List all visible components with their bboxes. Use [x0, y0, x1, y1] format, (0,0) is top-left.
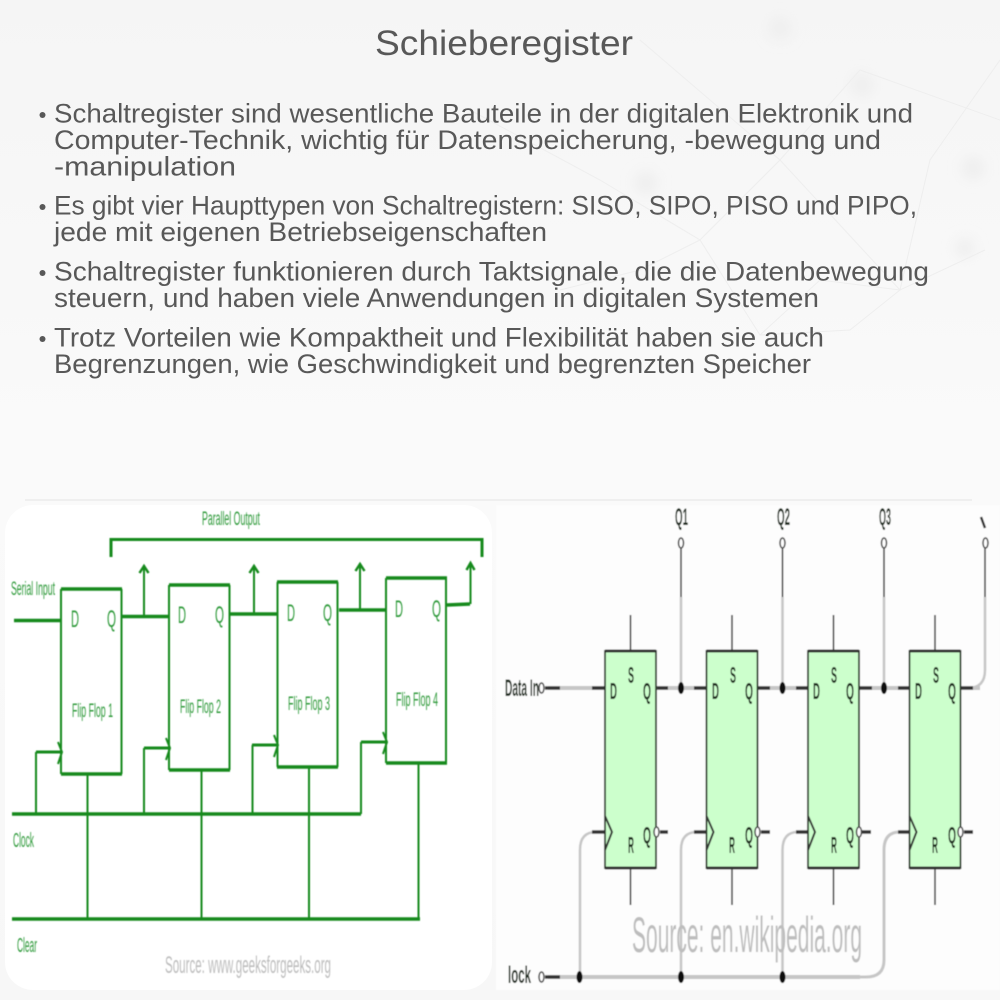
diagram labels: lock: [508, 962, 531, 989]
diagram labels: Q2: [777, 504, 790, 531]
diagram labels: D: [813, 678, 820, 704]
diagram labels: S: [730, 662, 736, 688]
light grey wires: [548, 597, 985, 977]
bullet 1: Schaltregister sind wesentliche Bauteile in der digitalen Elektronik und: [54, 98, 913, 128]
diagram labels: Parallel Output: [202, 509, 260, 530]
diagram labels: Q: [215, 602, 224, 629]
panel: D flip-flop shift register diagram: Q: [948, 822, 956, 848]
bullet 2: Es gibt vier Haupttypen von Schaltregistern: SISO, SIPO, PISO und PIPO,: [54, 190, 917, 220]
diagram labels: Q: [643, 822, 651, 848]
diagram labels: Data In: [505, 675, 539, 702]
bullet 3: [40, 256, 929, 313]
diagram labels: S: [831, 662, 837, 688]
flip-flop boxes: [61, 578, 447, 774]
wiring: [12, 540, 482, 919]
panel: SIPO flip-flop diagram: Source: www.geeksforgeeks.org: [165, 952, 331, 979]
diagram labels: Flip Flop 1: [72, 701, 113, 722]
diagram labels: Serial Input: [11, 579, 55, 600]
junction dots: [576, 682, 887, 983]
diagram labels: S: [628, 662, 634, 688]
diagram labels: D: [71, 606, 79, 633]
bullet 4: [40, 322, 824, 379]
diagram labels: Clear: [17, 935, 37, 957]
diagram labels: S: [933, 662, 939, 688]
register blocks: [605, 651, 960, 868]
diagram labels: D: [915, 678, 922, 704]
diagram labels: Q: [745, 822, 753, 848]
diagram labels: Flip Flop 2: [180, 697, 221, 718]
diagram labels: [505, 504, 956, 989]
diagram labels: D: [287, 600, 295, 627]
diagram labels: R: [932, 832, 938, 858]
bullet 1: -manipulation: [54, 152, 236, 182]
diagram labels: Flip Flop 3: [288, 694, 330, 715]
bullet 1: Computer-Technik, wichtig für Datenspeicherung, -bewegung und: [54, 125, 881, 155]
bullet list: [40, 98, 929, 379]
terminals: [539, 538, 988, 982]
diagram labels: D: [178, 602, 186, 629]
bullet 2: [40, 190, 917, 247]
diagram labels: Q: [846, 678, 854, 704]
diagram labels: Q: [643, 678, 651, 704]
diagram labels: R: [628, 832, 634, 858]
panel: D flip-flop shift register diagram: [496, 504, 1000, 990]
bullet 2: jede mit eigenen Betriebseigenschaften: [53, 217, 547, 247]
bullet 3: steuern, und haben viele Anwendungen in digitalen Systemen: [54, 283, 819, 313]
bullet 4: Trotz Vorteilen wie Kompaktheit und Flexibilität haben sie auch: [54, 322, 824, 352]
diagram labels: Q: [846, 822, 854, 848]
panel: D flip-flop shift register diagram: Q: [948, 678, 956, 704]
diagram labels: Clock: [13, 830, 34, 852]
diagram labels: D: [395, 596, 403, 623]
panel: SIPO flip-flop diagram: Q: [432, 596, 441, 623]
diagram labels: Q1: [675, 504, 688, 531]
diagram labels: R: [831, 832, 837, 858]
bullet 1: [40, 98, 913, 182]
bullet 3: Schaltregister funktionieren durch Taktsignale, die die Datenbewegung: [54, 256, 929, 286]
diagram labels: Q: [745, 678, 753, 704]
title: Schieberegister: [375, 24, 633, 63]
diagram labels: D: [610, 678, 617, 704]
diagram labels: Q: [323, 600, 332, 627]
diagram labels: Q3: [879, 504, 891, 531]
diagram labels: R: [729, 832, 735, 858]
diagram labels: D: [712, 678, 719, 704]
diagram labels: Q: [107, 606, 116, 633]
diagram labels: [11, 509, 441, 957]
dark wiring: [545, 517, 985, 977]
diagram labels: Flip Flop 4: [396, 690, 438, 711]
bullet 4: Begrenzungen, wie Geschwindigkeit und begrenzten Speicher: [54, 349, 811, 379]
panel: SIPO flip-flop diagram: [5, 505, 492, 990]
